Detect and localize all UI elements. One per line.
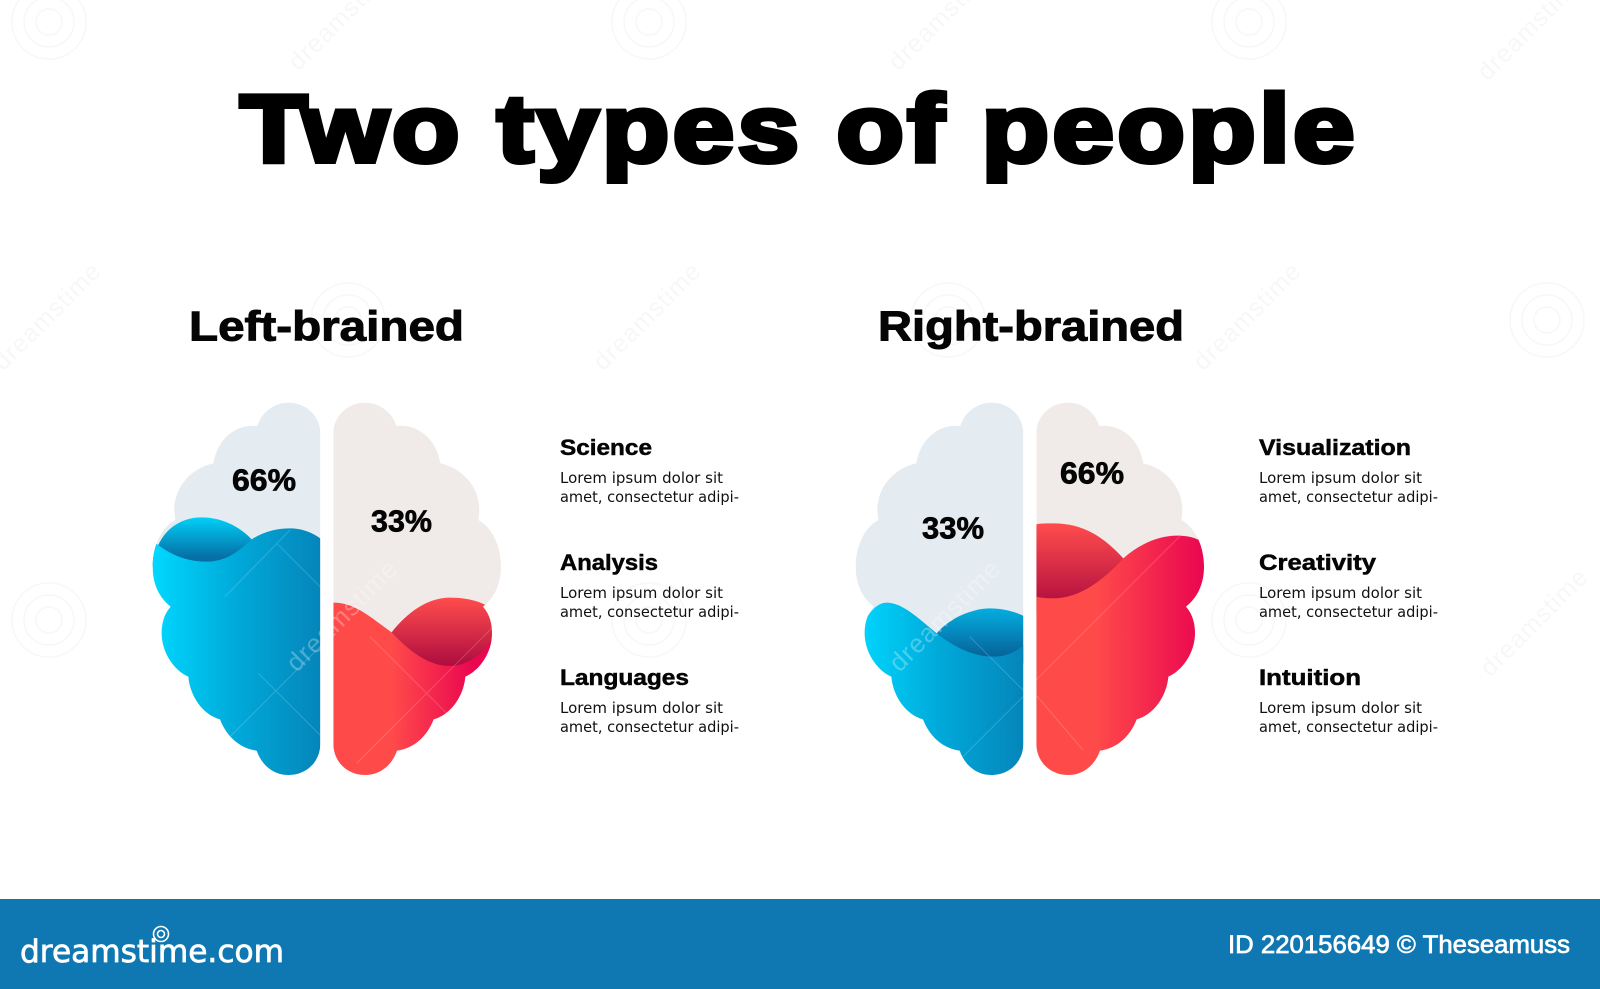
item: Intuition: [1259, 665, 1438, 736]
item: Intuition: amet, consectetur adipi-: [1259, 718, 1438, 736]
item: Creativity: [1259, 550, 1438, 621]
item: Languages: amet, consectetur adipi-: [560, 718, 739, 736]
item: Science: [560, 435, 739, 506]
heading: left-brained: Left-brained: [189, 302, 464, 350]
watermark on brain: dreamstime: [883, 553, 1007, 677]
image id and credit: ID 220156649 © Theseamuss: [1228, 931, 1570, 959]
item: Creativity: amet, consectetur adipi-: [1259, 603, 1438, 621]
value: 33%: 33%: [371, 504, 432, 538]
brain chart: left-brained: [130, 380, 530, 813]
heading: right-brained: Right-brained: [878, 302, 1184, 350]
item: Languages: Languages: [560, 665, 689, 690]
watermark: repeated spirals and diagonal marks: [0, 0, 1594, 682]
watermark on brain: dreamstime: [280, 553, 404, 677]
watermark: repeated spirals and diagonal marks: dreamstime: [588, 257, 707, 376]
right hemisphere: 33%: [333, 402, 501, 775]
item: Intuition: Intuition: [1259, 665, 1361, 690]
item: Visualization: Lorem ipsum dolor sit: [1259, 469, 1422, 487]
title: Two types of people: [240, 76, 1358, 182]
item: Science: Science: [560, 435, 652, 460]
brand text: dreamstime.com: [20, 934, 284, 970]
item: Languages: Lorem ipsum dolor sit: [560, 699, 723, 717]
item: Creativity: Lorem ipsum dolor sit: [1259, 584, 1422, 602]
icon: spiral logo: [154, 926, 168, 942]
panel: right-brained: [856, 310, 1438, 775]
item: Intuition: Lorem ipsum dolor sit: [1259, 699, 1422, 717]
item: Languages: [560, 665, 739, 736]
left hemisphere: 66%: [152, 402, 320, 775]
item: Analysis: [560, 550, 739, 621]
item: Analysis: Analysis: [560, 550, 658, 575]
item: Creativity: Creativity: [1259, 550, 1377, 575]
item: Visualization: [1259, 435, 1438, 506]
right hemisphere: 66%: [1036, 402, 1204, 775]
brain chart: right-brained: [856, 402, 1204, 775]
item: Visualization: amet, consectetur adipi-: [1259, 488, 1438, 506]
item: Analysis: amet, consectetur adipi-: [560, 603, 739, 621]
item: Analysis: Lorem ipsum dolor sit: [560, 584, 723, 602]
value: 66%: 66%: [1060, 456, 1124, 490]
panel: left-brained: [152, 310, 738, 775]
item: Science: Lorem ipsum dolor sit: [560, 469, 723, 487]
value: 66%: 66%: [232, 464, 296, 498]
item: Science: amet, consectetur adipi-: [560, 488, 739, 506]
left hemisphere: 33%: [856, 402, 1024, 775]
watermark: repeated spirals and diagonal marks: dreamstime: [1475, 563, 1594, 682]
footer bar: [0, 899, 1600, 989]
value: 33%: 33%: [922, 512, 984, 546]
watermark: repeated spirals and diagonal marks: dreamstime: [1188, 257, 1307, 376]
item: Visualization: Visualization: [1259, 435, 1411, 460]
